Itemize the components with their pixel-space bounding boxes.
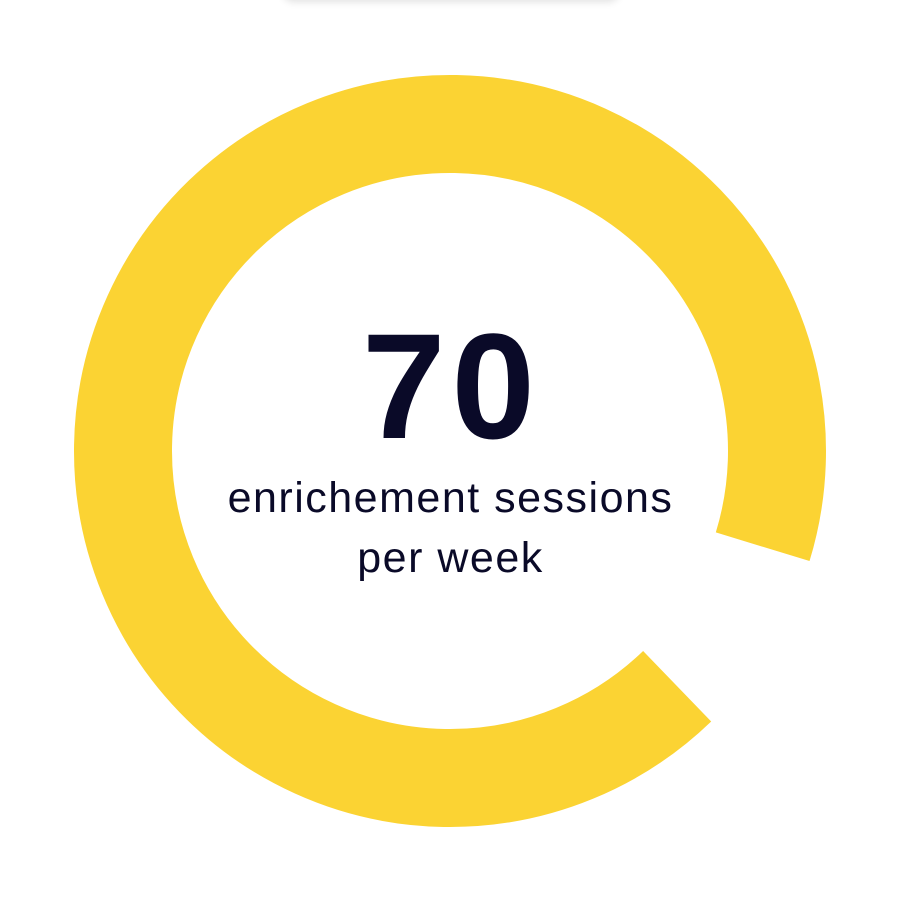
center label: enrichement sessions — [228, 474, 673, 522]
center value: 70 — [362, 302, 541, 470]
center label — [228, 474, 673, 582]
center label: per week — [357, 534, 544, 582]
